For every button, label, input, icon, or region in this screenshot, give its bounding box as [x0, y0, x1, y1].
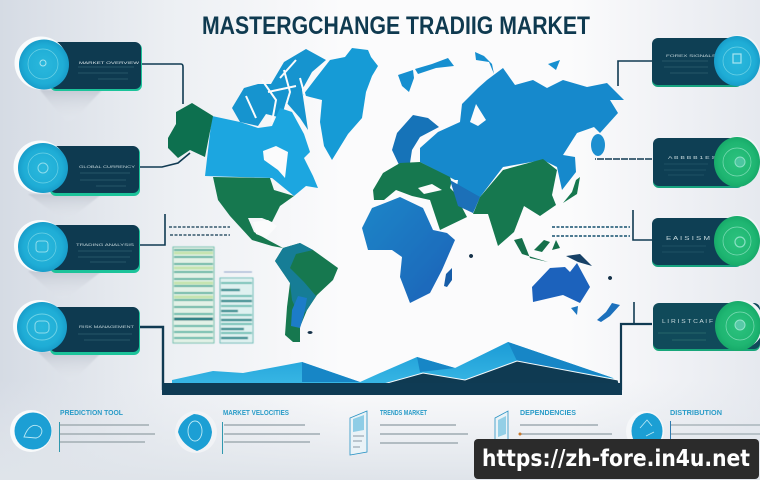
map: Japan [563, 177, 580, 203]
map: Caspian region [450, 180, 480, 213]
card: left 1 [14, 36, 142, 91]
text lines [224, 425, 320, 442]
map: Scandinavia [392, 115, 439, 167]
icon: circle [714, 35, 760, 86]
icon: circle [14, 140, 68, 194]
heading: PREDICTION TOOL [60, 410, 124, 417]
heading: TRENDS MARKET [380, 410, 428, 417]
map: Arctic inlet [450, 91, 486, 126]
map: Southeast Asia [514, 238, 560, 262]
bottom item 2 [175, 410, 320, 454]
map: small islands [308, 254, 612, 334]
mountain: facets [302, 342, 613, 382]
rule [222, 422, 224, 454]
map: Hudson Bay [263, 146, 288, 178]
connector lines [139, 61, 652, 390]
map: Russia and Asia [420, 68, 624, 213]
dashed lines near Southeast Asia [552, 227, 630, 236]
map: Australia [532, 263, 590, 303]
map: New Guinea [566, 254, 592, 266]
map: Sakhalin [591, 134, 605, 156]
card: left 3 [14, 220, 140, 273]
map: South America west [275, 243, 316, 318]
card text: A B B B B 1 E S [668, 155, 716, 160]
icon: circle [14, 220, 68, 272]
map: Greenland [303, 48, 378, 160]
bottom item 1 [10, 410, 155, 452]
card: right 2 [653, 136, 760, 188]
map: South America [275, 243, 338, 342]
icon: circle [715, 300, 760, 351]
text lines [380, 425, 468, 443]
icon: circle [714, 136, 760, 187]
bottom item 4 [495, 410, 612, 450]
map: Argentina [291, 296, 307, 328]
card: left 4 [13, 300, 140, 355]
marker [518, 432, 522, 436]
card text: TRADING ANALYSIS [76, 243, 135, 247]
rule [58, 422, 60, 452]
card: right 4 [653, 300, 760, 351]
icon: circle [714, 215, 760, 266]
rule [670, 421, 672, 440]
card text: FOREX SIGNALS [666, 54, 717, 58]
map: New Zealand [597, 303, 620, 322]
map: Iceland and Svalbard [398, 52, 560, 92]
map: Canadian Arctic [232, 49, 326, 130]
url banner [474, 439, 759, 479]
map: Gulf of Mexico [253, 220, 277, 238]
card: left 2 [14, 140, 140, 196]
mountain: blue peaks [172, 342, 618, 384]
icon: scroll bubble [175, 411, 217, 453]
world map [168, 48, 624, 342]
bottom item 3 [350, 410, 468, 455]
map: Black Sea [418, 180, 458, 194]
map: Canada [205, 108, 318, 196]
shadows under left cards [28, 90, 102, 384]
icon: chart bubble [10, 410, 52, 452]
card text: MARKET OVERVIEW [79, 61, 140, 65]
bar table left [173, 247, 214, 343]
map: United States and Mexico [213, 177, 294, 248]
heading: DEPENDENCIES [520, 410, 576, 417]
text lines [671, 425, 760, 434]
bar table right [220, 272, 253, 343]
map: China and India [473, 159, 557, 246]
mountain: dark ridge [380, 361, 622, 395]
map: Europe and Middle East [373, 162, 467, 230]
mountain: base bar [162, 383, 622, 395]
icon: book [495, 411, 508, 450]
card: right 3 [652, 215, 760, 267]
mountain chart [162, 342, 622, 395]
map: Tasmania [571, 306, 578, 315]
card text: L I R I S T C A I F [662, 319, 713, 325]
card text: GLOBAL CURRENCY [79, 165, 136, 169]
map: Arctic channels [246, 60, 306, 122]
title: MASTERGCHANGE TRADIIG MARKET [202, 12, 590, 40]
bottom item 5 [626, 410, 760, 451]
map: Africa [362, 197, 455, 303]
icon: circle [13, 300, 67, 352]
icon: document [350, 411, 367, 455]
heading: DISTRIBUTION [670, 410, 722, 417]
text lines [520, 425, 612, 434]
map: Madagascar [444, 268, 452, 287]
card: right 1 [652, 35, 760, 87]
card text: E A I S I S M [666, 236, 710, 242]
heading: MARKET VELOCITIES [223, 410, 289, 417]
icon: circle [626, 411, 664, 451]
card text: RISK MANAGEMENT [79, 325, 135, 329]
icon: circle [14, 36, 69, 90]
text lines [60, 425, 155, 442]
map: Alaska [168, 103, 213, 158]
